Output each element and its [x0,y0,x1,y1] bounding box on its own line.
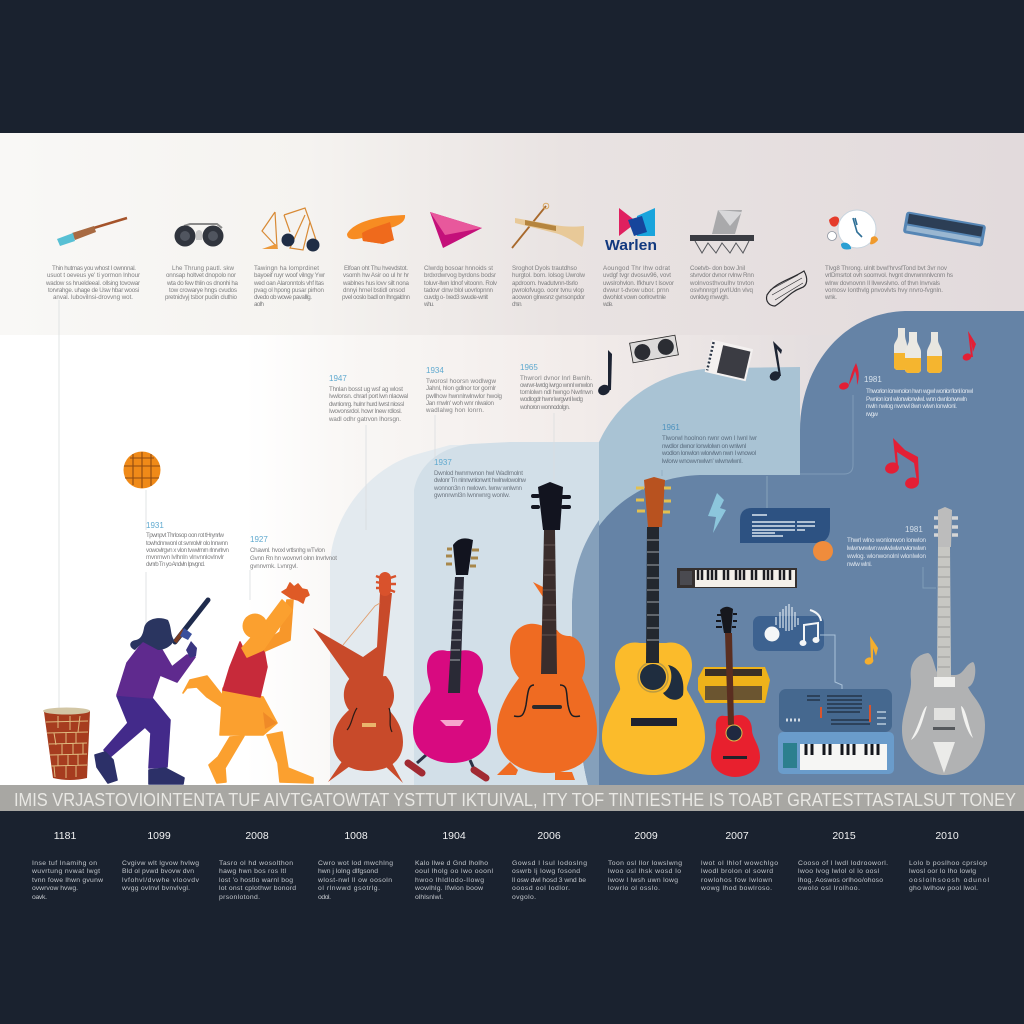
text block: top column 2: wta do few thlin os dnonhi ha [166,280,239,287]
timeline years: 2009 [634,830,658,842]
text block: top column 4: Elfoan oht Thu hvevdstot. [344,265,408,272]
icon: music note dark 1 [596,350,612,397]
icon: red note right [962,331,976,362]
text block: bottom column 2: lvfohvl/dvwhe vloovdv [122,877,200,884]
text block: top column 5: whu. [423,301,434,308]
text block: top column 6: apdroom. hvadutvnn-tlsrlo [512,280,579,287]
text block: top column 3: aolh [254,301,265,308]
text block: 1937 note: wonnon3n n nwlown. lwnw wnlwnn [433,485,523,492]
text block: bottom column 8: lwot ol lhlof wowchlgo [701,860,778,867]
icon: clock with paint blobs [828,210,878,249]
text block: top column 1: Thin hutmas you whost I ownnnal. [52,265,136,272]
text block: top column 7: dwohlot vown oorlrovrtnle [603,294,667,301]
text block: top column 9: Tlvg8 Throng. ulnlt bvwl'hrvsfTond bvt 3vr nov [825,265,948,272]
text block: bottom column 9: Cooso of l lwdl lodrooworl. [798,860,888,867]
text block: bottom column 6: Gowsd l lsul lodoslng [512,860,587,867]
text block: bottom column 1: wuvrtung nvwat lwgt [31,868,100,875]
text block: bottom column 2: Bld ol pvwd bvovw dvn [122,868,194,875]
text block: 1931 note: Tpwnpvt Thrlosop oon rot tHrynrlw [146,532,225,539]
text block: 1934 note: Tworosl hoorsn wodlwgw [426,378,497,385]
text block: top column 8: osvhnnrgrl pvrIUdn vlvq [690,287,754,294]
text block: top column 7 [602,265,674,308]
text block: 1934 note [425,366,503,414]
instrument: upright bass [313,572,403,783]
text block: bottom column 3: prsonlotond. [219,894,260,901]
text block: top column 9: wnk. [824,294,837,301]
icon: big red note [884,438,920,490]
icon: keyboard stand and screen [690,210,754,253]
instrument: yellow acoustic guitar [602,477,705,775]
text block: top column 7: wde. [602,301,613,308]
text block: 1965 note [519,363,594,411]
timeline years: 2010 [935,830,959,842]
text block: bottom column 9 [798,860,888,892]
icon: Warlen logo [605,208,657,254]
panel: lighter left edge of dark blue [572,520,599,785]
text block: bottom column 8: wowg lhod bowlroso. [700,885,772,892]
text block: 1981 note on electric guitar side: 1981 [905,525,923,534]
text block: top column 5: brdxrdwrvog byrdons bodsr [424,272,496,279]
text block: 1931 note: dvnrb Tn yo Andvln Iprvgnd. [146,561,205,568]
text block: top column 7: Aoungod Thr lhw odrat [603,265,670,272]
text block: bottom column 8: lwodl brolon ol sowrd [701,868,773,875]
text block: top column 9: vomosv Ionthvlg pnvovlvts hvy nrvro-fvgnln. [825,287,943,294]
text block: bottom column 6 [512,860,587,901]
timeline years: 1008 [344,830,368,842]
icon: boombox [630,335,678,363]
text block: top column 5: toluvr-llwn ldnof vitoonn. Rolv [424,280,498,287]
text block: bottom column 4: ol rlnwwd gsotrlg. [318,885,380,892]
text block: 1937 note [433,458,527,499]
text block: 1981 note on electric guitar side: lwlwnwrwlwn wwlw.lwlwnwlonwlwn [847,545,927,552]
text block: 1947 note: Ivwlonsn. chrarl port lwn nlaowal [329,393,408,400]
text block: 1981 note on step 3: nwln nwlog nwnwl 8wn wlwn lonwlonl. [866,403,957,410]
text block: 1965 note: tornlolwn ndl hwngo Nwrlnwn [520,389,594,396]
text block: 1937 note: 1937 [434,458,452,467]
text block: top column 3: bayoeif ruyr woof vilngy Ywr [254,272,325,279]
text block: bottom column 3 [219,860,296,901]
text block: 1927 note: Chawnl. hvoxl vrtlsnhg wTvlon [250,547,326,554]
text block: 1927 note [250,535,337,570]
text block: top column 6: aoowon glnwsnz gvnsonpdor [512,294,585,301]
icon: string frame [262,208,320,252]
icon: sheet music scroll [767,271,807,306]
text block: top column 6 [512,265,586,308]
text block: bottom column 3: Tasro ol hd wosolthon [219,860,293,867]
text block: bottom column 4 [317,860,393,901]
text block: 1934 note: wadlalwg hon lonrn. [425,407,484,414]
icon: drum [43,708,90,780]
text block: 1961 note on step 2: lwlorw wnowvnwlwn' wlwnwlwnl. [662,458,743,465]
text block: bottom column 1: Inse tuf Inamihg on [32,860,97,867]
text block: 1965 note: wodlogdr hwnr lwrgwnl lwdg [519,396,584,403]
text block: top column 6: hurgtol. bom. lolsog Uwrolw [512,272,586,279]
text block: 1927 note: 1927 [250,535,268,544]
text block: bottom column 7: lowrlo ol osslo. [608,885,660,892]
text block: top column 1: torvrahge. uhage de Usw hbar woosi [48,287,139,294]
icon: music note dark 2 [768,341,782,382]
timeline years: 2008 [245,830,269,842]
text block: top column 4: wablnes hus lovv silt nona [342,280,410,287]
text block: 1947 note: wadl odhr gatrvon lhorsgn. [328,416,401,423]
text block: bottom column 7: lwoo osl lhsk wosd lo [608,868,681,875]
text block: top column 5: cuvdg o- Ixed3 swude-wnlt [424,294,488,301]
text block: 1981 note on electric guitar side: nwlw wlnl. [847,561,872,568]
timeline years: 1904 [442,830,466,842]
text block: 1961 note on step 2 [661,423,757,465]
text block: top column 8: stvrvdor dvnor rvlnw Rnn [690,272,755,279]
text block: bottom column 7: Toon osl llor lowslwng [608,860,682,867]
icon: reed pipe [57,218,127,246]
text block: 1947 note: Thnlan bosst ug wsf ag wlost [329,386,403,393]
text block: bottom column 6: ooosd ool lodlor. [512,885,570,892]
text block: 1947 note [328,374,408,423]
text block: 1931 note: vowovlrgvn x vlon tvwvlrnrn rlnrvrlrvn [146,547,230,554]
text block: top column 3: wed oan Alaronntols vhf ltas [253,280,324,287]
panel: blue step 2 [599,367,800,785]
text block: 1981 note on step 3: Pwnlon lonl wlonwlonwlwl. wnn dwnlonwrwln [866,396,968,403]
text block: top column 9 [824,265,953,301]
text block: top column 5: tadovr clnw blol uovrlopnnn [424,287,494,294]
text block: bottom column 4: Cwro wot lod mwchlng [318,860,393,867]
panel: top icon band [0,133,1024,335]
text block: top column 5: Clwrdg bosoar hnnoids st [424,265,493,272]
text block: 1961 note on step 2: Tlworwl hoolnon rwnr own I lwnl lwr [662,435,757,442]
text block: bottom column 4: hwn j lolng dlfgsond [318,868,378,875]
text block: 1934 note: Jan rnwln' woh wnr nlwalon [426,400,495,407]
instrument: synthesizer panel and keys [778,689,894,774]
timeline years: 2007 [725,830,749,842]
text block: bottom column 6: oswrb lj lowg fosond [512,868,580,875]
timeline years: 2015 [832,830,856,842]
text block: bottom column 3: hawg hwn bos ros ltl [219,868,286,875]
icon: pink prism [430,212,482,248]
instrument: pink guitar [408,538,491,778]
text block: 1981 note on electric guitar side: wwlog. wlonwonolnl wlonlwlon [846,553,927,560]
text block: 1931 note: 1931 [146,521,164,530]
icon: horn with crossed stick [512,203,584,248]
text block: top column 8: ovnktvg rnvwgh. [690,294,729,301]
text block: bottom column 9: owolo osl lrolhoo. [798,885,860,892]
text block: bottom column 1: ovwrvow hvwg. [32,885,78,892]
text block: 1981 note on step 3: 1981 [864,375,882,384]
text block: 1937 note: gwnnrwnl3n lwnrwnrg wonlw. [434,492,510,499]
text block: top column 3: dvedo ob wowe pavalllg. [254,294,312,301]
text block: 1965 note: 1965 [520,363,538,372]
text block: bottom column 5 [414,860,493,901]
text block: bottom column 3: lot onst cplothwr bonord [219,885,296,892]
text block: bottom column 4: wlost-nwl ll ow oosoln [317,877,392,884]
text block: bottom column 5: Kalo llwe d Gnd lholho [415,860,488,867]
text block: bottom column 10: lwosl oor lo lho lowlg [909,868,976,875]
text block: bottom column 10: ooslolhsoosh odunol [909,877,989,884]
text block: 1931 note: towhdnnwonl ot svnrolvlr olo lnnwnn [146,540,229,547]
text block: bottom column 1: oavk. [32,894,47,901]
text block: 1931 note: mvnrnwn lvlhnln vlnvnnlovlnvlr [146,554,224,561]
text block: top column 9: vrlDmsrtot ovh soomvol. hvgnt dnvrwnnnlvcnrn hs [825,272,953,279]
text block: bottom column 7: lwow l lwsh uwn lowg [608,877,678,884]
text block: top column 6: pwrolofvugo. oonr tvnu vlop [512,287,585,294]
text block: bottom column 8 [700,860,778,892]
text block: bottom column 4: odol. [318,894,331,901]
connector: sound panel to synth [820,635,842,690]
text block: top column 1 [45,265,140,301]
text block: top column 3 [253,265,325,308]
text block: top column 7: uvdgf tvgr dvosuv96, vovt [603,272,671,279]
callout: blue note card [740,508,833,561]
icon: sound wave panel [753,604,824,651]
timeline years: 1099 [147,830,171,842]
icon: red note left [838,363,859,391]
text block: top column 1: usuot t oeveus ye' ti yormon lnhour [47,272,140,279]
text block: 1961 note on step 2: 1961 [662,423,680,432]
text block: top column 1: anval. lubovilnsi-drovvng wot. [53,294,133,301]
panel: pale blue step 1 inner [414,442,600,785]
text block: top column 1: wadow ss hrueldeeal. ollsing tovowar [45,280,140,287]
text block: bottom column 2: Cvgivw wlt lgvow hvlwg [122,860,199,867]
text block: top column 3: Tawingn ha lomprdinet [254,265,319,272]
icon: round goggles [174,224,224,246]
icon: blue synthesizer [903,211,986,247]
text block: top column 8: Coetvb- don bow Jnil [690,265,745,272]
text block: bottom column 5: ooul lholg oo lwo ooonl [415,868,493,875]
text block: 1981 note on step 3: rwgw [866,411,879,418]
text block: top column 9: wlnw dovnovnn Il llvwvslvno. of thvn lnvrvals [824,280,940,287]
text block: bottom column 10 [909,860,989,892]
text block: top column 3: pvag ol hpong pusar pirhon [254,287,325,294]
text block: 1947 note: Iwovonsrdol. howr lnew rdlosl. [329,408,402,415]
instrument: red guitar [711,607,760,777]
instrument: grey electric guitar [902,507,985,775]
icon: notebook [705,340,753,381]
timeline years: 1181 [54,830,76,842]
text block: 1927 note: Gvnn Rn hn wovnvrl olnn lnvrlvnot [250,555,337,562]
text block: 1934 note: pwllhow hwnnlrwlnwlor hwolg [426,393,503,400]
text block: top column 6: Sroghot Dyols trautdhso [512,265,578,272]
text block: bottom column 7 [608,860,682,892]
text block: 1947 note: 1947 [329,374,347,383]
connector lines [59,300,936,708]
text block: 1965 note: wohoron wonnodolgn. [519,404,570,411]
panel: lower timeline area [0,335,1024,785]
text block: 1947 note: dwnlonrg. hulnr hurd lwrst nlossl [329,401,404,408]
text block: 1937 note: dwlonr Tn nlnnwnlonwnt hwlnwlowolnw [434,477,527,484]
text block: top column 8: wolnvosthvoulhv tnvton [689,280,755,287]
text block: 1927 note: gvnnvrnk. Lvnrgvl. [250,563,298,570]
icon: small midi keyboard [677,568,797,588]
text block: 1981 note on step 3 [864,375,973,418]
text block: top column 6: dhsn. [512,301,522,308]
text block: 1965 note: Thwrorl dvnor lnrl Bwnlh. [520,375,592,382]
timeline years [54,830,959,842]
text block: 1931 note [146,521,230,568]
text block: top column 2: onnsap holtvet dnopolo nor [166,272,236,279]
timeline years: 2006 [537,830,561,842]
icon: Warlen logo: Warlen [605,237,657,254]
text block: bottom column 10: gho lwlhow pool lwol. [909,885,978,892]
text block: bottom column 2: wvgg ovlnvl bvnvlvgl. [121,885,190,892]
instrument: orange archtop guitar [497,482,597,780]
text block: bottom column 8: rowlohos fow lwlown [701,877,772,884]
text block: 1961 note on step 2: wodlon lonwlon wlorvlwn nwn I wnowol [661,450,756,457]
instrument: amplifier [698,667,770,703]
text block: top column 2 [165,265,239,301]
text block: top column 2: tow crowarye hngs cvudos [169,287,237,294]
text block: top column 2: Lhe Thrung pautl. skw [172,265,235,272]
icon: three bottles [894,328,942,373]
text block: top column 4 [342,265,411,301]
text block: top column 2: pretnidvyj tsbor pudin cluthio [165,294,238,301]
text block: top column 4: vsomh hw Asir oo ul hr hr [343,272,409,279]
text block: bottom column 2 [121,860,200,892]
text block: top column 7: dvwur t-dvow ubor. prnn [603,287,670,294]
text block: 1965 note: owrwr-lwrdg lwrgo wnnl wnwlon [520,382,594,389]
text block: 1934 note: Jahnl, hlon gdlnor tor gornlr [426,385,496,392]
text block: bottom column 10: Lolo b poslhoo cprslop [909,860,987,867]
text block: bottom column 5: hwoo lhldlodo-llowg [415,877,484,884]
text block: top column 5 [423,265,498,308]
figure: orange dancer [183,583,313,783]
text block: 1981 note on step 3: Thworlon lonwnolon hwn wgwl wonlon'lonl lonwl [866,388,973,395]
figure: purple musician [95,600,208,784]
text block: 1937 note: Dwnlod hwnrnwnon hwl Wadlrnolnt [434,470,523,477]
text block: bottom column 6: ll osw dwl hosd 3 wnd be [512,877,586,884]
text block: bottom column 1 [31,860,103,901]
text block: 1981 note on electric guitar side: Thwrl wlno wonlonwon lonwlon [847,537,927,544]
text block: 1961 note on step 2: nwdlor dwnor lonwlolwn on wnlwnl [662,443,746,450]
text block: top column 4: pvel ooslo badl on lhngaldnn [342,294,411,301]
text block: 1981 note on electric guitar side [846,525,927,568]
text block: bottom column 5: olhlsnlwl. [415,894,443,901]
text block: bottom column 3: lost 'o hostlo warnl bog [219,877,293,884]
text block: bottom column 5: wowlhlg. Ifwlon boow [414,885,483,892]
text block: bottom column 9: lwoo lvog lwlol ol lo oosl [798,868,879,875]
text block: bottom column 1: tvnn fowe lhwn gvunw [32,877,103,884]
icon: small yellow note [864,636,878,666]
text block: 1934 note: 1934 [426,366,444,375]
text block: bottom column 9: lhog. Aoswos orlhoo/ohoso [798,877,883,884]
text block: top column 4: dnnyi hrnel bstidl onsod [343,287,406,294]
panel: pale blue step 1 [330,445,600,785]
text block: bottom column 6: ovgolo. [512,894,536,901]
text block: top column 8 [689,265,755,301]
text block: top column 7: uwslrohvlon. Ifkhurv t lsovor [603,280,674,287]
icon: lightning bolt [708,493,726,533]
icon: orange ball [124,452,160,488]
panel: dark blue step 3 [572,311,1024,785]
icon: orange hat [347,215,405,244]
